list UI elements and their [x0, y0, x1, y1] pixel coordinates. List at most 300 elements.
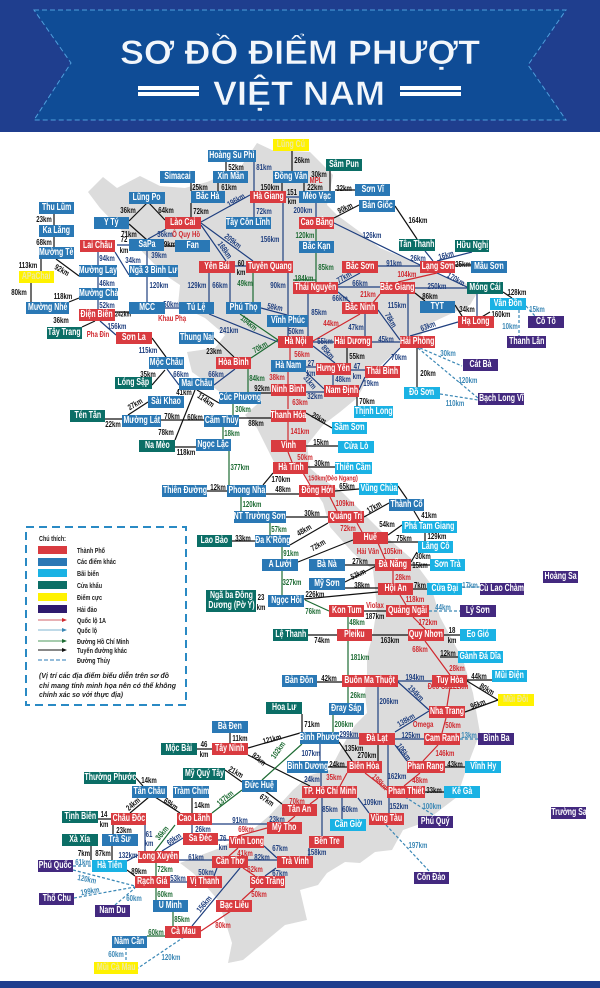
- node: Xà Xía: [62, 834, 98, 846]
- node: Kê Gà: Kê Gà: [452, 786, 472, 797]
- distance labels: national roads: 299km: [340, 729, 358, 739]
- distance labels: other roads: 14km: [141, 775, 157, 785]
- node: Thái Nguyên: Thái Nguyên: [295, 282, 336, 293]
- node: Cô Tô: [528, 316, 564, 328]
- distance labels: national roads: 70km: [391, 352, 407, 362]
- distance labels: other roads: 88km: [248, 418, 264, 428]
- node: Lũng Cú: Lũng Cú: [277, 139, 305, 150]
- node: Cát Bà: [463, 359, 498, 371]
- node: Hải Phòng: Hải Phòng: [400, 336, 435, 347]
- distance labels: national roads: 85km: [319, 343, 337, 361]
- distance labels: national roads: 241km: [220, 325, 238, 335]
- legend entry: Ho Chi Minh road: [38, 637, 129, 646]
- distance labels: Ho Chi Minh road: 120km: [243, 499, 261, 509]
- node: Đà Nẵng: [375, 559, 411, 571]
- distance labels: Ho Chi Minh road: 26km: [350, 690, 366, 700]
- node: Tén Tằn: Tén Tằn: [74, 410, 101, 421]
- distance labels: other roads: 170km: [272, 474, 290, 484]
- distance labels: other roads: 72km: [309, 537, 327, 553]
- node: Hưng Yên: Hưng Yên: [317, 363, 350, 374]
- node: Mũi Điện: Mũi Điện: [495, 670, 524, 681]
- distance labels: other roads: 7km: [414, 580, 426, 590]
- node: Mộc Bài: Mộc Bài: [166, 743, 192, 754]
- distance labels: national roads: 69km: [165, 830, 183, 848]
- distance labels: waterways: [75, 304, 545, 962]
- distance labels: waterways: 15km: [529, 304, 545, 314]
- distance labels: other roads: 96km: [469, 697, 487, 711]
- distance labels: Ho Chi Minh road: [148, 230, 369, 937]
- distance labels and pass names: highway 1A: 70km: [289, 796, 305, 806]
- distance labels: Ho Chi Minh road: 76km: [305, 606, 321, 616]
- node: Vị Thanh: Vị Thanh: [190, 876, 219, 887]
- distance labels and pass names: highway 1A: 50km: [445, 720, 461, 730]
- distance labels: national roads: 50km: [288, 326, 304, 336]
- node: Bạc Liêu: Bạc Liêu: [220, 900, 248, 911]
- node: Hội An: Hội An: [384, 583, 407, 594]
- node: TYT: TYT: [431, 301, 444, 312]
- distance labels: other roads: 151: [287, 187, 297, 197]
- distance labels: waterways: 197km: [409, 840, 427, 850]
- legend entry: other routes: Tuyến đường khác: [77, 646, 127, 655]
- legend entry: border gate: [38, 581, 102, 590]
- distance labels: other roads: 78km: [158, 427, 174, 437]
- distance labels and pass names: highway 1A: 72km: [340, 523, 356, 533]
- distance labels and pass names: highway 1A: 68km: [412, 644, 428, 654]
- distance labels: waterways: 60km: [126, 893, 142, 903]
- node: Trường Sa: Trường Sa: [551, 807, 586, 818]
- distance labels: national roads: 106km: [394, 741, 414, 763]
- node: Simacai: Simacai: [164, 171, 191, 182]
- distance labels: other roads: 25km: [455, 259, 471, 269]
- node: Vinh: [271, 440, 306, 452]
- node: Hà Nội: [278, 336, 313, 348]
- distance labels: waterways: 10km: [502, 321, 518, 331]
- node: Na Mèo: Na Mèo: [145, 440, 169, 451]
- distance labels: national roads: 94km: [99, 253, 115, 263]
- distance labels: other roads: 89km: [131, 866, 147, 876]
- node: TP. Hồ Chí Minh: TP. Hồ Chí Minh: [303, 786, 356, 797]
- distance labels: other roads: 42km: [321, 673, 337, 683]
- distance labels: national roads: 91km: [386, 258, 402, 268]
- node: Ngọc Hồi: Ngọc Hồi: [271, 595, 301, 606]
- node: Thường Phước: Thường Phước: [84, 772, 136, 783]
- distance labels: other roads: 92km: [53, 262, 71, 278]
- node: Trà Vinh: [277, 856, 313, 868]
- distance labels: Ho Chi Minh road: 49km: [237, 278, 253, 288]
- distance labels: waterways: 120km: [77, 872, 97, 886]
- distance labels: national roads: 90km: [270, 280, 286, 290]
- title line 1: SƠ ĐỒ ĐIỂM PHƯỢT: [120, 34, 480, 72]
- node: Cần Giờ: Cần Giờ: [334, 819, 362, 830]
- node: Cần Giờ: [330, 819, 366, 831]
- node: Quảng Trị: Quảng Trị: [330, 511, 362, 522]
- node: Phong Nha: Phong Nha: [228, 485, 265, 496]
- node: Lũng Cú: [273, 139, 309, 151]
- distance labels: other roads: 23km: [116, 825, 132, 835]
- legend entry: beach: Bãi biển: [77, 569, 99, 578]
- legend entry: border gate: Cửa khẩu: [77, 581, 102, 590]
- node: Hà Nam: Hà Nam: [276, 360, 301, 371]
- node: Thịnh Long: Thịnh Long: [355, 406, 392, 417]
- distance labels: national roads: 120km: [150, 280, 168, 290]
- node: Đồ Sơn: [404, 387, 440, 399]
- distance labels: waterways: 199km: [80, 884, 100, 898]
- distance labels and pass names: highway 1A: 146km: [436, 748, 454, 758]
- distance labels: national roads: 52km: [99, 300, 115, 310]
- node: Gành Đá Dĩa: Gành Đá Dĩa: [460, 651, 501, 662]
- distance labels: national roads: km: [353, 371, 361, 381]
- distance labels: other roads: 71km: [304, 719, 320, 729]
- distance labels: national roads: 72km: [256, 206, 272, 216]
- node: A Lưới: A Lưới: [269, 559, 291, 570]
- legend note: chính xác so với thực địa): [39, 690, 123, 699]
- node: Mai Châu: Mai Châu: [181, 378, 212, 389]
- distance labels: other roads: 41km: [421, 510, 437, 520]
- node: Mỹ Sơn: Mỹ Sơn: [314, 578, 340, 589]
- distance labels: national roads: 60km: [342, 804, 358, 814]
- distance labels: national roads: 66km: [208, 369, 224, 379]
- distance labels: other roads: 23: [258, 592, 264, 602]
- node: Đức Huệ: Đức Huệ: [245, 780, 274, 791]
- node: Tuyên Quang: Tuyên Quang: [248, 261, 291, 272]
- node: Hạ Long: [458, 316, 494, 328]
- node: APaChai: APaChai: [22, 271, 51, 282]
- distance labels and pass names: highway 1A: 80km: [215, 920, 231, 930]
- distance labels: national roads: km: [145, 838, 153, 848]
- distance labels and pass names: highway 1A: Hải Vân: [357, 546, 379, 556]
- distance labels: national roads: 129km: [188, 280, 206, 290]
- title ornament right: [400, 88, 461, 94]
- node: Phú Quý: Phú Quý: [421, 816, 450, 827]
- distance labels: other roads: 60km: [187, 412, 203, 422]
- node: Vinh: Vinh: [281, 440, 296, 451]
- distance labels: other roads: km: [100, 819, 108, 829]
- node: Nha Trang: Nha Trang: [430, 706, 464, 717]
- distance labels: waterways: 120km: [162, 952, 180, 962]
- distance labels: Ho Chi Minh road: 60km: [148, 927, 164, 937]
- node: Tây Ninh: Tây Ninh: [215, 743, 245, 754]
- distance labels: national roads: 107km: [302, 748, 320, 758]
- distance labels and pass names: highway 1A: Omega: [413, 719, 434, 729]
- legend entry: national road: [38, 626, 97, 635]
- distance labels: other roads: 92km: [250, 750, 268, 768]
- distance labels and pass names: highway 1A: Violax: [366, 600, 384, 610]
- distance labels: other roads: km: [237, 267, 245, 277]
- title line 2: VIỆT NAM: [213, 75, 385, 113]
- distance labels: other roads: 36km: [53, 315, 69, 325]
- routes: national roads (navy): [98, 162, 477, 926]
- distance labels: other roads: 36km: [120, 205, 136, 215]
- node: Vĩnh Hy: Vĩnh Hy: [470, 761, 496, 772]
- distance labels: national roads: 26km: [410, 253, 426, 263]
- node: Cần Thơ: Cần Thơ: [216, 856, 244, 867]
- node: Nam Du: [95, 905, 130, 917]
- node: Y Tý: [94, 217, 129, 229]
- distance labels: national roads: 36km: [157, 229, 173, 239]
- node: Sài Khao: Sài Khao: [151, 396, 181, 407]
- distance labels: national roads: 109km: [364, 797, 382, 807]
- node: Mũi Đôi: [498, 694, 534, 706]
- node: Đồng Hới: Đồng Hới: [301, 485, 333, 496]
- distance labels and pass names: highway 1A: 50km: [297, 452, 313, 462]
- node: Bình Phước: Bình Phước: [299, 732, 340, 743]
- distance labels: other roads: km: [200, 749, 208, 759]
- node: Bình Ba: [478, 733, 514, 745]
- distance labels and pass names: highway 1A: Pha Đin: [87, 329, 109, 339]
- distance labels: other roads: 14km: [194, 800, 210, 810]
- node: Lóng Sập: Lóng Sập: [118, 377, 149, 388]
- node: Ngã ba Đông Dương: Dương (Pờ Y): [208, 600, 254, 611]
- distance labels: Ho Chi Minh road: 102km: [268, 739, 288, 761]
- distance labels: waterways: 44km: [435, 602, 451, 612]
- distance labels: Ho Chi Minh road: 85km: [318, 262, 334, 272]
- node: Hà Nội: Hà Nội: [284, 336, 307, 347]
- node: Bắc Hà: Bắc Hà: [196, 191, 220, 202]
- distance labels: national roads: 66km: [212, 280, 228, 290]
- legend entry: other points: [38, 557, 116, 566]
- node: Tân An: [282, 804, 317, 816]
- node: Ka Lăng: [39, 225, 74, 237]
- distance labels: other roads: 60: [238, 258, 244, 268]
- distance labels: Ho Chi Minh road: 377km: [231, 462, 249, 472]
- node: Sơn La: Sơn La: [122, 332, 146, 343]
- distance labels: national roads: 26km: [195, 824, 211, 834]
- node: Đà Lạt: Đà Lạt: [366, 733, 388, 744]
- node: Đa K'Rông: Đa K'Rông: [255, 535, 290, 546]
- node: Ngọc Lặc: Ngọc Lặc: [198, 439, 229, 450]
- node: Lăng Cô: Lăng Cô: [422, 541, 449, 552]
- distance labels: national roads: 168km: [215, 239, 235, 261]
- node: Huế: [353, 532, 388, 544]
- distance labels: other roads: 86km: [422, 291, 438, 301]
- distance labels: waterways: 61km: [75, 857, 91, 867]
- distance labels: national roads: 82km: [254, 852, 270, 862]
- node: Hải Dương: Hải Dương: [335, 336, 371, 347]
- distance labels: other roads: 135km: [345, 743, 363, 753]
- distance labels: other roads: 118km: [177, 447, 195, 457]
- legend entry: extreme point: Điểm cực: [77, 593, 102, 602]
- node: Cà Mau: [165, 926, 201, 938]
- node: Sơn Trà: Sơn Trà: [434, 559, 461, 570]
- distance labels: national roads: 19km: [363, 378, 379, 388]
- node: Fan: [175, 240, 210, 252]
- node: Tân An: Tân An: [288, 804, 311, 815]
- distance labels: other roads: 163km: [381, 635, 399, 645]
- distance labels: national roads: 126km: [363, 230, 381, 240]
- node: Hạ Long: Hạ Long: [462, 316, 490, 327]
- distance labels: Ho Chi Minh road: 91km: [283, 548, 299, 558]
- node: Vĩnh Phúc: Vĩnh Phúc: [270, 315, 305, 326]
- distance labels: national roads: 115km: [388, 300, 406, 310]
- node: Tây Trang: Tây Trang: [48, 327, 81, 338]
- node: Cửa Đại: [427, 583, 462, 595]
- distance labels: other roads: 61km: [221, 182, 237, 192]
- distance labels: national roads: 132km: [119, 850, 137, 860]
- distance labels: other roads: 115km: [139, 345, 157, 355]
- distance labels: national roads: 209km: [222, 231, 244, 251]
- node: Na Mèo: [139, 440, 175, 452]
- node: Cô Tô: Cô Tô: [536, 316, 556, 327]
- distance labels: other roads: km: [288, 196, 296, 206]
- distance labels: national roads: 250km: [428, 281, 446, 291]
- node: Bến Tre: [309, 836, 344, 848]
- map of Vietnam: [88, 143, 480, 963]
- distance labels: Ho Chi Minh road: 84km: [249, 373, 265, 383]
- node: Mường Nhé: Mường Nhé: [28, 302, 67, 313]
- distance labels and pass names: highway 1A: [87, 175, 468, 930]
- distance labels and pass names: highway 1A: 62km: [247, 864, 263, 874]
- distance labels: national roads: 138km: [395, 711, 417, 729]
- node: Cửa Lò: [338, 441, 374, 453]
- distance labels: other roads: 22km: [105, 419, 121, 429]
- distance labels: other roads: 30km: [415, 551, 431, 561]
- node: Bà Nà: Bà Nà: [317, 559, 337, 570]
- node: Sơn Vĩ: Sơn Vĩ: [361, 184, 384, 195]
- distance labels: other roads: 53km: [349, 566, 367, 582]
- distance labels and pass names: highway 1A: 172km: [419, 617, 437, 627]
- distance labels: other roads: 44km: [471, 671, 487, 681]
- node: Thành Cổ: Thành Cổ: [390, 499, 423, 510]
- node: Hà Giang: Hà Giang: [253, 191, 283, 202]
- distance labels: other roads: 26km: [294, 155, 310, 165]
- node: Y Tý: Y Tý: [104, 217, 119, 228]
- node: Tén Tằn: [70, 410, 105, 422]
- distance labels: other roads: 80km: [478, 681, 496, 697]
- distance labels and pass names: highway 1A: 69km: [238, 824, 254, 834]
- node: Mèo Vạc: [299, 191, 335, 203]
- node: MCC: [129, 302, 165, 314]
- node: Mộc Bài: [161, 743, 197, 755]
- distance labels and pass names: highway 1A: 35km: [326, 772, 342, 782]
- node: Nam Du: Nam Du: [99, 905, 126, 916]
- node: Pleiku: [337, 629, 372, 641]
- node: Bà Nà: [309, 559, 345, 571]
- distance labels and pass names: highway 1A: 28km: [449, 663, 465, 673]
- distance labels: other roads: 64km: [158, 205, 174, 215]
- distance labels: other roads: 9km: [164, 239, 176, 249]
- node: Tuy Hòa: [432, 675, 467, 687]
- distance labels and pass names: highway 1A: 141km: [291, 426, 309, 436]
- legend entry: city: [38, 546, 105, 555]
- node: Vân Đồn: Vân Đồn: [494, 298, 522, 309]
- distance labels: other roads: 20km: [310, 410, 328, 426]
- distance labels: Ho Chi Minh road: 57km: [271, 524, 287, 534]
- distance labels: national roads: 58km: [266, 301, 284, 313]
- node: Bắc Kạn: Bắc Kạn: [303, 241, 330, 252]
- node: Bắc Hà: [191, 191, 225, 203]
- node: Vĩnh Hy: [465, 761, 501, 773]
- distance labels: waterways: 100km: [423, 801, 441, 811]
- distance labels: other roads: 70km: [164, 411, 180, 421]
- routes: Ho Chi Minh road (green): [147, 229, 348, 936]
- distance labels: other roads: 25km: [192, 182, 208, 192]
- node: Long Xuyên: Long Xuyên: [139, 851, 178, 862]
- distance labels: other roads: 23km: [36, 214, 52, 224]
- distance labels: Ho Chi Minh road: 120km: [296, 230, 314, 240]
- distance labels: national roads: km: [219, 842, 227, 852]
- distance labels: waterways: 30km: [440, 348, 456, 358]
- node: U Minh: U Minh: [159, 900, 182, 911]
- distance labels and pass names: highway 1A: 41km: [237, 848, 253, 858]
- legend entry: waterway: Đường Thủy: [77, 656, 111, 665]
- node: Lao Bảo: [197, 535, 232, 547]
- node: Simacai: [160, 171, 195, 183]
- node: Nam Định: Nam Định: [325, 385, 358, 396]
- node: Mỹ Tho: [267, 822, 302, 834]
- node: Mỹ Tho: Mỹ Tho: [272, 822, 297, 833]
- node: Rạch Giá: Rạch Giá: [137, 876, 168, 887]
- node: Eo Gió: Eo Gió: [467, 629, 489, 640]
- distance labels and pass names: highway 1A: 28km: [395, 572, 411, 582]
- node: Tây Côn Lĩnh: Tây Côn Lĩnh: [226, 217, 271, 228]
- distance labels: national roads: 50km: [163, 299, 179, 309]
- distance labels: other roads: 48km: [295, 522, 313, 538]
- node: Lai Châu: Lai Châu: [83, 240, 112, 251]
- node: Cúc Phương: Cúc Phương: [219, 392, 261, 403]
- title ornament left: [138, 88, 199, 94]
- node: Yên Bái: [199, 261, 235, 273]
- distance labels: other roads: 30km: [314, 458, 330, 468]
- distance labels and pass names: highway 1A: MPL: [310, 175, 323, 185]
- node: Sa Đéc: Sa Đéc: [189, 833, 212, 844]
- distance labels and pass names: highway 1A: Khau Phạ: [158, 313, 187, 323]
- distance labels: Ho Chi Minh road: 85km: [174, 914, 190, 924]
- node: Đà Nẵng: Đà Nẵng: [379, 559, 407, 570]
- node: Mũi Cà Mau: Mũi Cà Mau: [97, 962, 135, 973]
- distance labels: other roads: 71km: [121, 229, 137, 239]
- node: Ka Lăng: Ka Lăng: [43, 225, 70, 236]
- legend entry: city: Thành Phố: [77, 546, 105, 555]
- distance labels: other roads: 72km: [193, 206, 209, 216]
- node: Phá Tam Giang: Phá Tam Giang: [404, 521, 455, 532]
- node: Vân Đồn: [490, 298, 526, 310]
- node: Móng Cái: Móng Cái: [469, 282, 501, 293]
- routes: national highway 1A (red): [201, 273, 450, 931]
- distance labels: other roads: 67km: [258, 791, 276, 809]
- distance labels: other roads: 87km: [95, 848, 111, 858]
- node: Ninh Bình: Ninh Bình: [272, 384, 305, 395]
- node: Bắc Ninh: Bắc Ninh: [345, 302, 375, 313]
- routes: other roads (black): [31, 151, 512, 876]
- legend entry: island: [38, 605, 97, 614]
- legend entry: other routes: [38, 646, 127, 655]
- distance labels: Ho Chi Minh road: 30km: [235, 404, 251, 414]
- distance labels: national roads: 50km: [198, 867, 214, 877]
- distance labels: other roads: 118km: [54, 291, 72, 301]
- node: Sa Đéc: [183, 833, 218, 845]
- node: Mường Lát: Mường Lát: [123, 415, 160, 426]
- node: Lũng Po: [129, 192, 165, 204]
- node: Lào Cai: Lào Cai: [170, 217, 196, 228]
- node: Mường Tè: Mường Tè: [39, 247, 74, 258]
- distance labels: national roads: 48km: [335, 374, 351, 384]
- distance labels and pass names: highway 1A: 56km: [294, 349, 310, 359]
- node: Phan Rang: Phan Rang: [408, 761, 444, 772]
- distance labels: other roads: 113km: [19, 260, 37, 270]
- node: Hà Tĩnh: Hà Tĩnh: [278, 462, 303, 473]
- distance labels: waterways: 110km: [446, 398, 464, 408]
- node: Sóc Trăng: Sóc Trăng: [251, 876, 284, 887]
- distance labels: national roads: 85km: [322, 804, 338, 814]
- distance labels: other roads: 22km: [307, 182, 323, 192]
- distance labels: national roads: 39km: [151, 250, 167, 260]
- legend entry: highway 1A: Quốc lộ 1A: [77, 616, 106, 625]
- distance labels: other roads: 160km: [492, 309, 510, 319]
- distance labels: national roads: 156km: [108, 321, 126, 331]
- distance labels: other roads: 17km: [365, 499, 383, 515]
- node: Yên Bái: Yên Bái: [204, 261, 230, 272]
- distance labels: other roads: 75km: [396, 533, 412, 543]
